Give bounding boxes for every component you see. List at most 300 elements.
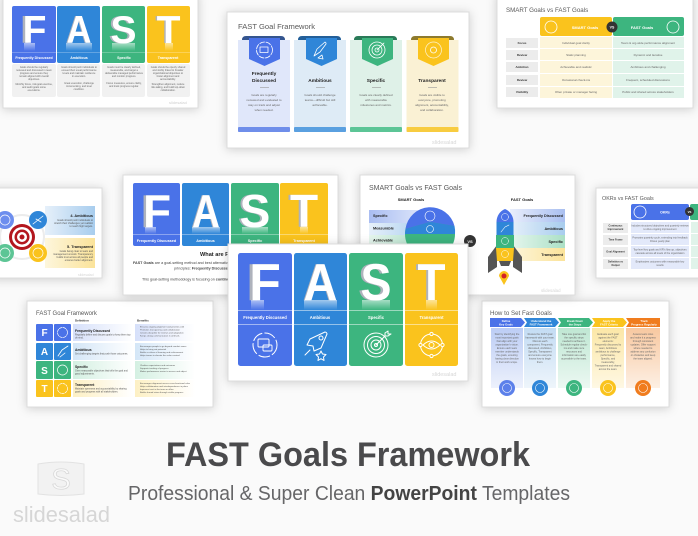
logo: slidesalad: slidesalad: [13, 502, 110, 527]
step 2: knows how to begin: [529, 358, 552, 360]
tile T: Transparent: [158, 56, 179, 60]
tile dividers: [238, 310, 458, 325]
table rows: Goal Alignment: [606, 250, 625, 254]
table rows: Output: [611, 264, 620, 267]
step 1: having clear direction: [495, 358, 519, 360]
row F: Creates discipline for reviews and adaptation: [140, 332, 184, 334]
title: FAST Goals Framework: [166, 436, 530, 474]
table rows: [506, 37, 684, 98]
tile A: A: [66, 9, 92, 52]
row F: Keeps strong communication in all levels: [140, 334, 180, 338]
description cards: Goals should be openly shared: [151, 66, 186, 69]
FAST bands: [510, 209, 565, 261]
step 4: Specific, and: [601, 358, 616, 360]
column: Frequently Discussed: Discussed: [252, 78, 276, 84]
column: Specific: with measurable: [365, 98, 387, 102]
tile A: A: [191, 185, 219, 237]
step 4: team, Ambitious: [599, 347, 618, 350]
description cards: and audit goals some: [22, 86, 46, 89]
tile S: [349, 253, 403, 366]
slide title: SMART Goals vs FAST Goals: [369, 185, 462, 192]
table rows: Continuous: [609, 224, 623, 228]
step 5: where needed to: [634, 347, 653, 350]
table rows: Achievable and realistic: [560, 65, 592, 69]
FAST bands: Transparent: [541, 253, 564, 257]
step 2: FAST Framework: [530, 322, 553, 326]
step 2: Specific, Transparent: [528, 350, 552, 354]
blue text band: to reach high targets.: [70, 225, 93, 228]
panel: OKRs vs FAST table slide: [596, 188, 698, 278]
step 1: organization's vision.: [495, 344, 519, 346]
panel: FAST tiles with text slide: [123, 175, 338, 295]
table rows: Ambitious and challenging: [630, 65, 666, 69]
tile A: A: [192, 185, 220, 237]
step 1: Key Goals: [499, 322, 513, 326]
table rows: Team & org-wide performance alignment: [621, 41, 675, 45]
heading: What are FAST Goals?: [200, 252, 261, 258]
tile A: Ambitious: [310, 315, 331, 320]
step 4: across the team.: [599, 368, 618, 371]
row F: Ensures ongoing alignment and priorities with: [140, 326, 185, 328]
tile A: Ambitious: [70, 56, 88, 60]
slide title: How to Set Fast Goals: [490, 310, 552, 317]
description cards: remain aligned with overall: [19, 75, 49, 78]
column: Frequently Discussed: Goals are regularly: [251, 93, 277, 97]
tile S: S: [240, 185, 270, 237]
tile S: Specific: [368, 315, 385, 320]
description cards: deliverable managed performance: [105, 72, 144, 75]
column: Specific: Specific: [367, 78, 386, 84]
row S: good adjustments.: [75, 372, 95, 376]
column: Frequently Discussed: stay on track and adjust: [248, 103, 280, 107]
row S: Supports tracking of progress: [140, 367, 169, 370]
letter F: F: [249, 254, 281, 312]
tile T: [280, 183, 328, 246]
step 3: needed to achieve it.: [562, 340, 586, 343]
step 2: and ensure everyone: [528, 354, 552, 357]
tile S: Specific: [248, 239, 262, 243]
tile F: F: [20, 9, 44, 52]
column: Frequently Discussed: reviewed and evaluated to: [246, 98, 282, 102]
step 4: measurably,: [601, 361, 615, 364]
step 4: elements:: [603, 340, 614, 343]
row F: Frequently Discussed: [75, 329, 110, 333]
tile T: T: [155, 9, 179, 52]
step 5: address any confusion: [630, 350, 656, 354]
column: Ambitious: [294, 36, 346, 132]
step 4: performance,: [601, 354, 616, 357]
letter T: T: [418, 254, 446, 312]
table rows: Public and shared across stakeholders: [622, 90, 674, 94]
step 4: Transparent and shared: [595, 364, 622, 368]
description cards: Monthly focus, mid-goal exercise,: [15, 83, 53, 86]
row F: [36, 324, 195, 341]
blue text band: 4. Ambitious: [70, 214, 93, 218]
blue text band: [45, 206, 95, 235]
icon: target radar: [364, 331, 391, 357]
row A: Helps to bring out potential: [140, 348, 167, 351]
SMART column heading: SMART Goals: [398, 197, 425, 202]
column: Ambitious: teams—difficult but still: [305, 98, 336, 102]
row A: A: [41, 347, 48, 358]
description cards: levels and maintain resilience: [63, 72, 96, 75]
row F: Promotes transparency and collaboration: [140, 328, 181, 332]
row T: Maintain openness and accountability by sharing: [75, 388, 127, 390]
tile A: A: [66, 9, 90, 52]
SMART stacked circle: [405, 207, 455, 259]
column headers: Definition: [75, 318, 89, 322]
panel: How to Set Fast Goals slide: [482, 301, 669, 407]
row A: Helps teams to elevate the value created: [140, 354, 180, 357]
description cards: objectives.: [28, 78, 40, 81]
description cards: condition.: [74, 88, 85, 91]
table header SMART: SMART Goals: [572, 25, 599, 30]
column headers: [75, 318, 149, 322]
row F: of mind.: [75, 336, 84, 340]
tile F: Frequently Discussed: [15, 56, 53, 60]
row S: [36, 361, 195, 379]
logo: slidesalad: [13, 462, 110, 527]
row T: goals and progress with all stakeholders.: [75, 390, 119, 394]
step 5: the team aligned.: [633, 358, 653, 360]
VS badge: VS: [467, 239, 473, 244]
step 5: [626, 318, 660, 396]
table rows: Occasional check-ins: [562, 78, 591, 82]
table header OKRs: OKRs: [660, 210, 670, 214]
tile S: [231, 183, 279, 246]
column: Specific: [350, 36, 402, 132]
FAST bands: Ambitious: [544, 227, 563, 231]
step 2: framework with your team.: [525, 336, 555, 340]
slide footer: slidesalad: [78, 273, 94, 277]
step 1: the goals, ensuring: [496, 354, 518, 357]
tile A: [57, 6, 100, 63]
table rows: Time Frame: [608, 238, 623, 242]
row S: Specific: [75, 365, 88, 369]
description cards: Goals should push individuals to: [61, 66, 98, 69]
description cards: in execution.: [72, 75, 86, 78]
step 2: [524, 318, 559, 396]
table rows: Individual goal clarity: [562, 41, 590, 45]
step 1: [490, 318, 525, 396]
row A: Encourages people to go beyond comfort zones: [140, 345, 187, 348]
table rows: Frequent, scheduled discussions: [626, 78, 670, 82]
step 4: ambitious to challenge: [596, 350, 621, 354]
tile S: S: [108, 9, 135, 52]
column: Ambitious: achievable.: [312, 103, 328, 107]
subtitle: Professional & Super Clean PowerPoint Templates: [128, 483, 570, 505]
slide title: SMART Goals vs FAST Goals: [506, 7, 588, 14]
panel: FAST framework table slide: [27, 301, 213, 407]
FAST bands: Specific: [548, 240, 563, 244]
table rows: Review: [517, 53, 528, 57]
SMART bands: Measurable: [373, 226, 394, 230]
letter A: A: [304, 254, 338, 312]
step 1: Define: [502, 319, 511, 323]
tile S: Specific: [117, 56, 131, 60]
description cards: risk-taking, and build top-down: [151, 86, 186, 89]
tile T: T: [290, 185, 318, 237]
step 3: Take one goal and list: [562, 333, 586, 336]
tile F: [12, 6, 56, 63]
description cards: incrementing, and level: [66, 85, 92, 88]
step 5: Progress Regularly: [631, 322, 657, 326]
column: Transparent: Goals are visible to: [419, 93, 445, 97]
letter F: F: [246, 254, 278, 312]
column: Transparent: [406, 36, 458, 132]
table rows: results: [656, 264, 664, 267]
SMART bands: Specific: [373, 214, 388, 218]
table rows: Top-level key goals and KR's flow up, objectives: [633, 248, 687, 252]
letter S: S: [358, 254, 389, 312]
description cards: Focus measures, ensure clarity,: [106, 82, 142, 85]
row A: [36, 343, 195, 360]
description text: This goal-setting methodology is focusing on continuous communication.: [142, 278, 263, 282]
step 4: Frequently discussed to: [595, 344, 622, 346]
description text: [133, 261, 286, 282]
tile T: T: [157, 9, 181, 52]
step 4: [592, 318, 627, 396]
slide title: FAST Goal Framework: [238, 22, 315, 31]
row F: Regularly define and discuss goals to keep them top: [75, 334, 131, 336]
VS badge: [606, 22, 618, 32]
step 5: updates. Offer support: [631, 344, 656, 346]
step 3: Break Down: [567, 319, 583, 323]
step 3: resources and: [566, 350, 583, 354]
step 4: against the FAST: [598, 336, 618, 340]
step 2: Understand the: [531, 319, 552, 323]
slide title: FAST Goal Framework: [36, 311, 98, 317]
tile T: [147, 6, 190, 63]
panel: SMART vs FAST rocket slide: [360, 175, 575, 295]
description text: principles: Frequently Discussed, Ambitious, Specific, Transparent.: [174, 266, 286, 270]
step 1: Start by identifying the: [495, 333, 520, 336]
step 2: Review the FAST goal: [528, 333, 553, 336]
step 3: the Steps: [569, 322, 582, 326]
letter S: S: [360, 254, 392, 312]
step 2: them.: [537, 361, 543, 364]
step 3: Schedule regular check-: [561, 344, 588, 346]
yellow text band: 5. Transparent: [67, 245, 94, 249]
yellow text band: Goals being clear to team and: [60, 250, 94, 253]
tile F: [133, 183, 180, 246]
panel: target diagram slide left: [0, 188, 102, 278]
table header FAST: [613, 17, 684, 36]
column: Transparent: and collaboration.: [420, 108, 444, 112]
table rows: cascade across all levels of the organization: [636, 252, 685, 255]
tile S: S: [238, 185, 268, 237]
column: Ambitious: Goals should challenge: [304, 93, 336, 97]
description cards: Strengthen alignment, reduce: [152, 83, 185, 86]
row S: S: [41, 366, 48, 377]
description cards: [12, 64, 190, 97]
column: Transparent: alignment, accountability,: [415, 103, 449, 107]
icon: rocket flame: [499, 271, 509, 285]
icon: eye and nodes: [419, 332, 444, 358]
icon: discussion cycle: [253, 333, 277, 357]
step 2: discussed, Ambitious,: [528, 347, 552, 350]
panel: main FAST slide: [228, 244, 468, 381]
step 4: Evaluate each goal: [597, 333, 619, 336]
panel: FAST Goal Framework ribbon slide: [227, 12, 469, 148]
step 1: Ensure each team: [497, 347, 517, 350]
row T: Transparent: [75, 383, 95, 387]
column: Ambitious: Ambitious: [308, 78, 332, 84]
description cards: executions.: [28, 89, 41, 92]
icon: target: [9, 224, 35, 250]
slide footer: slidesalad: [541, 288, 561, 293]
rocket: [488, 209, 522, 273]
table rows: Improvement: [608, 228, 624, 231]
table rows: Promotes quarterly cycle, extending into feedback: [632, 236, 688, 240]
description cards: Goals must be clearly defined,: [107, 66, 141, 69]
column: Frequently Discussed: [238, 36, 290, 132]
yellow text band: management at work. Transparency: [53, 253, 94, 256]
tile F: Frequently Discussed: [243, 315, 287, 320]
step 5: and make it a progress: [630, 336, 656, 340]
description cards: organizational objectives to: [153, 72, 184, 75]
tile T: Transparent: [293, 239, 316, 243]
description text: FAST Goals are a goal-setting method and best alternative to traditional models: [133, 261, 264, 265]
VS badge: VS: [688, 210, 691, 214]
column: Frequently Discussed: when needed.: [255, 108, 274, 112]
tile S: S: [110, 9, 137, 52]
yellow text band: builds trust across all people and: [57, 256, 94, 259]
tile T: T: [288, 185, 316, 237]
step 5: Assess team roles: [633, 333, 654, 336]
FAST column heading: FAST Goals: [511, 197, 534, 202]
slide footer: slidesalad: [432, 372, 456, 378]
panel: FAST tiles slide top left: [3, 0, 198, 108]
tile A: Ambitious: [196, 239, 215, 243]
row T: Builds shared vision through visible progress: [140, 391, 184, 394]
description cards: Great execution, challenge: [64, 82, 94, 85]
tile T: Transparent: [420, 315, 444, 320]
description cards: Goals should be regularly: [20, 66, 49, 69]
table rows: Review: [517, 78, 528, 82]
table rows: Often private or manager facing: [555, 90, 597, 94]
table rows: Emphasizes outcomes with measurable key: [636, 260, 685, 264]
row T: Encourages alignment across cross-functional roles: [140, 382, 191, 385]
table rows: Dynamic and iterative: [634, 53, 663, 57]
column: Frequently Discussed: Frequently: [252, 71, 277, 77]
tile T: [405, 253, 458, 366]
step 1: in their work scope.: [496, 361, 518, 364]
blue text band: Goals should push individuals to: [57, 219, 94, 222]
slide footer: slidesalad: [432, 140, 456, 146]
tile F: Frequently Discussed: [137, 239, 177, 243]
description cards: foster alignment and: [157, 75, 180, 78]
letter T: T: [416, 254, 444, 312]
yellow text band: [45, 238, 95, 268]
description cards: measurable, and target a: [110, 69, 139, 72]
row T: [36, 380, 195, 397]
step 5: through consistent: [633, 340, 654, 343]
step 3: ins and make sure: [564, 347, 585, 350]
row T: Improves trust in the team or office: [140, 388, 174, 391]
step 4: FAST Criteria: [600, 322, 618, 326]
step 5: or obstacles and keep: [631, 354, 656, 357]
letter A: A: [302, 254, 336, 312]
VS badge: VS: [610, 26, 615, 30]
description cards: and monitor progress.: [112, 75, 136, 78]
step 3: accessible to the team.: [561, 358, 587, 360]
table rows: Ambition: [516, 65, 529, 69]
slide title: OKRs vs FAST Goals: [602, 196, 654, 202]
tile A: [294, 253, 347, 366]
table rows: [603, 222, 698, 269]
step 2: component, Frequently: [527, 344, 554, 346]
row S: Clarifies expectations and outcomes: [140, 364, 176, 367]
table rows: to drive ongoing improvement: [644, 228, 677, 231]
column: Specific: milestones and metrics.: [360, 103, 392, 107]
row F: F: [41, 328, 48, 339]
tile F: F: [23, 9, 46, 52]
description cards: and visibly linked to broader: [152, 69, 184, 72]
column: Transparent: everyone, promoting: [418, 98, 446, 102]
step 1: most important goals: [495, 336, 519, 340]
column: Specific: Goals are clearly defined: [359, 93, 393, 97]
tile S: [102, 6, 145, 63]
SMART bands: [369, 210, 429, 248]
slide footer: slidesalad: [169, 100, 187, 105]
description cards: accountability.: [160, 78, 176, 81]
step 2: Discuss each: [533, 340, 548, 343]
row A: Set challenging targets that push those outcomes.: [75, 352, 128, 356]
table header FAST: [690, 204, 698, 220]
step 4: Apply the: [603, 319, 616, 323]
column headers: Benefits: [137, 318, 149, 322]
step 3: [558, 318, 593, 396]
step 1: member understands: [495, 350, 520, 354]
row T: Helps collaboration and interdependence in plans: [140, 385, 189, 388]
step 5: Track: [640, 319, 648, 323]
table header SMART: [540, 17, 612, 36]
step 3: the specific steps: [564, 336, 584, 340]
panel: SMART vs FAST table slide: [497, 0, 693, 108]
FAST bands: Frequently Discussed: [524, 214, 564, 218]
description cards: reviewed and discussed in team: [16, 69, 52, 72]
tile F: F: [143, 185, 171, 237]
table rows: Definition vs: [608, 260, 624, 264]
table header FAST: FAST Goals: [631, 25, 654, 30]
row S: Makes performance easier to assess and adjust: [140, 370, 187, 373]
tile F: [238, 253, 292, 366]
blue text band: stretch their challenges yet realistic: [54, 222, 94, 225]
tile F: F: [140, 185, 169, 237]
row A: Builds a culture of learning and achievement: [140, 351, 183, 354]
row T: T: [41, 384, 48, 395]
VS badge: [464, 235, 476, 247]
tile A: [182, 183, 229, 246]
description cards: progress and ensure they: [20, 72, 49, 75]
description cards: collaboration.: [161, 89, 176, 92]
step 3: information are easily: [562, 354, 587, 357]
table rows: Static planning: [566, 53, 586, 57]
table rows: Visibility: [516, 90, 528, 94]
row A: Ambitious: [75, 348, 92, 352]
ring and node circles: [0, 211, 47, 262]
table rows: Focus: [518, 41, 527, 45]
table rows: Includes structured objectives and quarterly reviews: [631, 224, 689, 228]
yellow text band: ensures better alignment.: [65, 259, 93, 262]
row S: Give measurable objectives that tells the goal and: [75, 370, 128, 372]
icon: rocket and star: [305, 332, 327, 360]
step 1: that align with your: [497, 340, 518, 343]
icon: logo S badge: S: [51, 464, 71, 496]
table rows: Drives yearly plan: [650, 240, 671, 243]
column: Transparent: Transparent: [418, 78, 446, 84]
